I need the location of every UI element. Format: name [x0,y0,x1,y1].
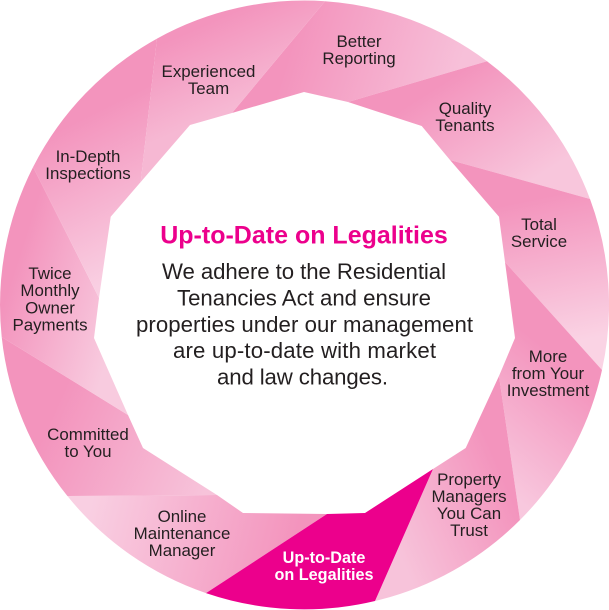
segment: Better Reporting: Reporting [322,49,396,68]
segment: Property Managers You Can Trust: Property [437,470,501,489]
segment: Experienced Team [141,1,325,182]
segment: Quality Tenants [348,61,590,199]
segment: Online Maintenance Manager: Online [158,507,206,526]
segment: Committed to You: to You [65,442,111,461]
segment: In-Depth Inspections: Inspections [45,164,131,183]
segment: Total Service [450,160,609,370]
segment: More from Your Investment: Investment [507,381,590,400]
segment: Experienced Team: Team [188,79,229,98]
segment: Property Managers You Can Trust: Managers [431,487,507,506]
segment: Up-to-Date on Legalities (highlighted): Up-to-Date [283,549,365,567]
segment: Quality Tenants: Quality [439,99,492,118]
segment: Online Maintenance Manager [67,495,327,593]
segment: Committed to You [2,337,217,496]
segment: In-Depth Inspections: In-Depth [56,147,120,166]
segment: Total Service: Total [521,215,557,234]
segment: Better Reporting [232,1,487,113]
segment: Experienced Team: Experienced [162,62,255,81]
segment: Property Managers You Can Trust: You Can [437,504,501,523]
segment: More from Your Investment: More [529,347,567,366]
segment: Property Managers You Can Trust [375,376,520,601]
segment: Up-to-Date on Legalities (highlighted) [206,469,433,609]
centre description: are up-to-date with market [173,338,436,363]
segment: In-Depth Inspections [33,39,157,298]
centre heading: Up-to-Date on Legalities [160,222,448,250]
segment: Twice Monthly Owner Payments: Payments [12,316,88,334]
segment: Twice Monthly Owner Payments: Owner [25,298,75,318]
centre description: and law changes. [217,364,388,390]
centre description: We adhere to the Residential [162,259,446,284]
segment: Better Reporting: Better [336,32,382,51]
segment: Online Maintenance Manager: Manager [149,541,216,560]
centre description [136,259,473,390]
segment: Online Maintenance Manager: Maintenance [134,524,230,543]
segment: Twice Monthly Owner Payments: Monthly [20,281,80,300]
centre description: Tenancies Act and ensure [177,286,431,310]
segment: Total Service: Service [511,232,567,251]
segment: Quality Tenants: Tenants [435,116,495,135]
segment: Property Managers You Can Trust: Trust [450,521,488,540]
segment: Committed to You: Committed [47,425,129,444]
segment: More from Your Investment [499,262,602,520]
segment: Twice Monthly Owner Payments: Twice [28,264,72,283]
segment: Twice Monthly Owner Payments [0,167,128,415]
segment: Up-to-Date on Legalities (highlighted): on Legalities [275,566,373,584]
centre description: properties under our management [136,312,473,337]
segment: More from Your Investment: from Your [512,364,585,383]
